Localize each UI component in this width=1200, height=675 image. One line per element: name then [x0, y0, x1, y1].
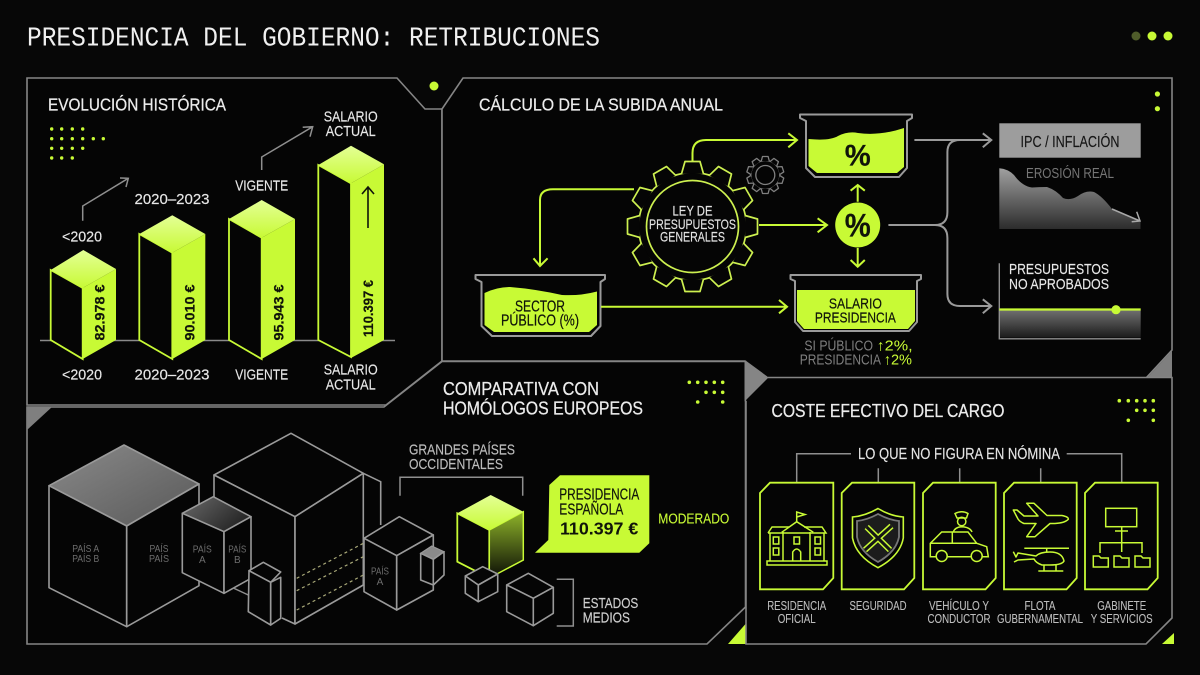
icon: main gear: LEY DE — [672, 203, 712, 219]
callout: presidencia española: ESPAÑOLA — [559, 502, 624, 519]
beaker: sector público: SECTOR — [515, 299, 565, 316]
cube: presidencia española lime — [457, 495, 523, 578]
decorative dot matrix — [1118, 399, 1155, 422]
cube: país a: PAÍS — [371, 564, 389, 578]
chart: erosión real — [999, 165, 1140, 229]
heading: comparativa — [443, 378, 643, 418]
label: grandes países occidentales: GRANDES PAÍSES — [409, 442, 515, 458]
panel: cálculo de la subida anual — [442, 78, 1172, 378]
status dots — [1132, 32, 1172, 40]
bar: <2020 — [51, 250, 116, 359]
beaker: top percent — [800, 114, 912, 177]
labels above bars: SALARIO — [324, 108, 378, 125]
bracket: estados medios — [557, 579, 573, 626]
subheading: lo que no figura en nómina: LO QUE NO FIGURA EN NÓMINA — [858, 446, 1061, 463]
callout: presidencia española — [535, 475, 649, 553]
beaker: salario presidencia: SALARIO — [829, 296, 882, 313]
card labels: FLOTA — [1024, 599, 1056, 613]
labels below bars: VIGENTE — [235, 366, 288, 383]
bracket: grandes países — [400, 477, 523, 496]
cube: large gray top: PAÍS — [149, 552, 169, 565]
note: si público: PRESIDENCIA — [800, 352, 881, 369]
corner accent gray — [27, 407, 52, 430]
arrows: percent up and down — [851, 185, 865, 267]
icon: main gear: PRESUPUESTOS — [649, 216, 736, 232]
bar: vigente: 95.943 € — [270, 284, 286, 340]
arrow: growth two — [262, 127, 313, 170]
cube: large gray top: PAÍS A — [72, 542, 99, 555]
cube: large gray top: PAÍS B — [72, 552, 99, 565]
heading: evolución histórica: EVOLUCIÓN HISTÓRICA — [48, 94, 226, 114]
cube: back large — [214, 433, 381, 624]
beaker: sector público — [476, 275, 605, 336]
labels below bars: SALARIO — [324, 361, 378, 378]
panel: coste efectivo del cargo — [744, 361, 1174, 644]
card labels: VEHÍCULO Y — [929, 598, 990, 613]
beaker: salario presidencia: PRESIDENCIA — [815, 310, 896, 327]
label: estados medios: MEDIOS — [583, 610, 630, 626]
card: gabinete y servicios — [1085, 483, 1158, 589]
bar: <2020: 82.978 € — [92, 284, 108, 340]
card labels: RESIDENCIA — [767, 599, 827, 613]
labels above bars: 2020–2023 — [134, 191, 210, 208]
cube: país a — [364, 517, 433, 610]
bar: vigente — [229, 200, 295, 359]
heading: comparativa: HOMÓLOGOS EUROPEOS — [443, 397, 643, 418]
beaker: salario presidencia — [790, 275, 921, 331]
beaker: sector público: PÚBLICO (%) — [501, 313, 579, 330]
corner accent lime — [728, 624, 746, 644]
cube: estados medios small — [465, 567, 498, 602]
note: si público: ↑2%, — [877, 337, 913, 354]
arrows: branching gray — [888, 133, 991, 313]
cube: large gray top: PAÍS — [150, 542, 169, 555]
decorative dot matrix — [50, 127, 105, 160]
connector lines — [797, 454, 1122, 482]
cube: país a: A — [377, 577, 384, 588]
box: ipc inflación — [999, 123, 1141, 158]
arrow: growth one — [83, 178, 128, 221]
card labels: GUBERNAMENTAL — [997, 612, 1083, 626]
box: ipc inflación: IPC / INFLACIÓN — [1020, 132, 1120, 151]
cube: estados medios medium — [507, 573, 553, 626]
baseline — [40, 340, 395, 342]
labels below bars: 2020–2023 — [134, 366, 210, 383]
arrow: sector to salario — [601, 300, 787, 313]
labels above bars: <2020 — [62, 228, 102, 245]
cube: medium gradient top: PAÍS — [193, 542, 212, 556]
cube: medium gradient top: B — [234, 555, 241, 566]
arrow: gear to sector beaker — [534, 189, 634, 266]
icon: percent circle: % — [845, 208, 871, 244]
decorative dot matrix — [688, 380, 724, 404]
card labels: OFICIAL — [778, 612, 816, 626]
chart: erosión real: EROSIÓN REAL — [1026, 165, 1114, 182]
cube: medium gradient top: PAÍS — [228, 542, 247, 556]
note: si público: SI PÚBLICO — [804, 337, 873, 354]
box: small gray top — [421, 546, 444, 585]
note: si público — [800, 337, 913, 369]
card: seguridad — [842, 483, 914, 589]
bar: salario actual: 110.397 € — [360, 280, 376, 337]
panel frame: coste — [746, 378, 1172, 644]
beaker: top percent: % — [845, 140, 871, 172]
corner accent gray — [744, 361, 768, 402]
labels above bars: ACTUAL — [326, 123, 376, 140]
icon: small gear — [746, 156, 784, 194]
card labels: SEGURIDAD — [850, 599, 906, 613]
panel frame: evolución — [27, 78, 442, 405]
chart: presupuestos no aprobados: NO APROBADOS — [1009, 276, 1109, 293]
icon: main gear — [628, 162, 758, 292]
panel: evolución histórica — [27, 78, 442, 405]
title: PRESIDENCIA DEL GOBIERNO: RETRIBUCIONES — [27, 24, 600, 54]
label: estados medios — [583, 596, 638, 626]
panel frame: cálculo — [442, 78, 1172, 378]
bar: 2020–2023 — [139, 215, 205, 359]
labels below bars: <2020 — [62, 366, 102, 383]
bar: salario actual — [318, 146, 384, 358]
arrow: gear to percent — [759, 218, 827, 232]
label: grandes países occidentales: OCCIDENTALES — [409, 457, 503, 473]
cube: medium gradient top — [182, 497, 251, 593]
labels above bars: VIGENTE — [235, 177, 288, 194]
accent dot — [430, 82, 438, 90]
chart: presupuestos no aprobados: PRESUPUESTOS — [1009, 261, 1109, 278]
labels below bars: ACTUAL — [326, 376, 376, 393]
card labels — [767, 598, 1153, 626]
note: si público: ↑2% — [884, 352, 912, 369]
card: vehículo y conductor — [923, 483, 996, 589]
panel: comparativa con homólogos europeos — [27, 362, 746, 644]
accent dots — [1155, 91, 1160, 111]
card: flota gubernamental — [1004, 483, 1077, 589]
heading: cálculo: CÁLCULO DE LA SUBIDA ANUAL — [479, 94, 723, 114]
chart: presupuestos no aprobados — [999, 261, 1141, 339]
heading: coste: COSTE EFECTIVO DEL CARGO — [772, 401, 1004, 421]
label: moderado: MODERADO — [658, 512, 729, 528]
corner accent — [1147, 351, 1172, 378]
card: residencia oficial — [760, 483, 833, 589]
card labels: CONDUCTOR — [928, 612, 990, 626]
label: grandes países occidentales — [409, 442, 515, 473]
label: estados medios: ESTADOS — [583, 596, 638, 612]
callout: presidencia española: PRESIDENCIA — [559, 487, 640, 504]
corner accent lime — [1162, 633, 1174, 644]
callout: presidencia española: 110.397 € — [560, 518, 639, 538]
arrow: gear to top beaker — [692, 133, 797, 162]
cube: medium gradient top: A — [199, 555, 206, 566]
panel frame: comparativa — [27, 362, 746, 644]
icon: percent circle — [835, 202, 880, 248]
card labels: GABINETE — [1097, 599, 1146, 613]
icon: main gear: GENERALES — [660, 229, 725, 245]
box: small tall — [233, 562, 281, 625]
card labels: Y SERVICIOS — [1091, 612, 1153, 626]
bar: 2020–2023: 90.010 € — [182, 284, 198, 340]
labels above bars — [62, 108, 378, 245]
cube: large gray top — [49, 445, 199, 627]
heading: comparativa: COMPARATIVA CON — [443, 378, 599, 399]
labels below bars — [62, 361, 378, 393]
